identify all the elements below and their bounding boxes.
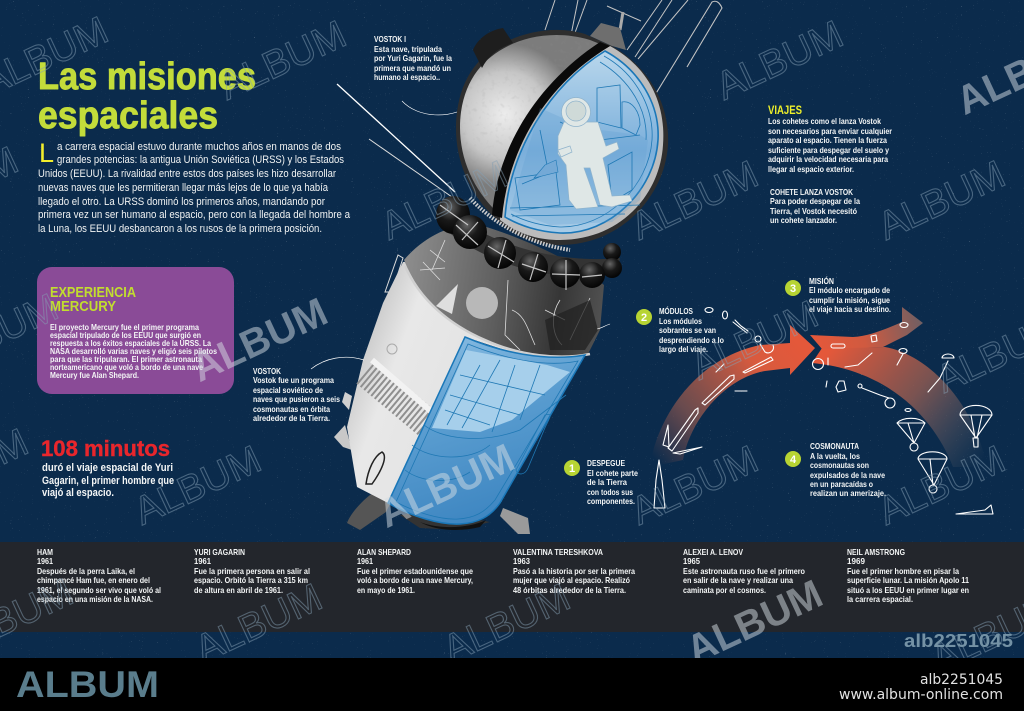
intro text block [38,138,351,235]
dome rim [405,266,590,357]
watermarks: ALBUM [372,436,521,537]
intro text block: nuevas naves que les permitieran llegar más lejos de lo que ya había [38,182,329,194]
mission trajectory arrows [650,307,993,514]
text block: Viajes: suficiente para despegar del suelo y [768,146,889,155]
arrow: ascent [650,325,815,467]
step 4: Cosmonauta: en un paracaídas o [810,480,873,489]
text block: Viajes: Los cohetes como el lanza Vostok [768,117,881,126]
watermarks: ALBUM [710,13,850,109]
arrow: return descent [812,347,987,467]
bio: Alan Shepard [357,548,473,595]
callout: 108 minutos [41,436,174,499]
text block: Viajes: aparato al espacio. Tienen la fuerza [768,136,887,145]
step 1: Despegue: 1 [569,463,575,475]
watermarks: ALBUM [128,438,268,534]
watermarks: ALBUM [625,153,765,249]
title: espaciales [38,95,218,137]
step 3: Misión [785,275,891,314]
watermarks: ALBUM [437,576,577,672]
sphere silver rim [500,46,663,240]
panel heading: EXPERIENCIA [50,285,136,301]
black separation band [492,42,610,218]
label: Vostok I [374,35,452,82]
bio: Yuri Gagarin: 1961 [194,557,211,566]
step 1: Despegue: El cohete parte [587,469,638,478]
bio: Neil Amstrong: NEIL AMSTRONG [847,548,905,557]
panel: Experiencia Mercury [37,267,234,394]
arrow: mission continues [810,307,923,349]
bio: Valentina Tereshkova: Pasó a la historia por ser la primera [513,567,635,576]
step 1: Despegue: de la Tierra [587,478,627,487]
step 1: Despegue: DESPEGUE [587,459,625,468]
antennae [545,0,722,95]
panel body: Mercury fue Alan Shepard. [50,371,139,380]
bio: Ham: Después de la perra Laika, el [37,567,135,576]
text block: Cohete lanza Vostok: un cohete lanzador. [770,216,837,225]
equipment dome [404,225,604,357]
bio: Alan Shepard: ALAN SHEPARD [357,548,411,557]
intro text block: a carrera espacial estuvo durante muchos años en manos de dos [57,141,341,153]
panel body: respuesta a los éxitos espaciales de la URSS. La [50,339,211,348]
bio: Alan Shepard: en mayo de 1961. [357,586,415,595]
text block: Viajes: llegar al espacio exterior. [768,165,854,174]
cabin panels [597,85,640,135]
step 4: Cosmonauta [785,442,886,498]
footer id and url [839,672,1003,703]
rear nozzle rim [420,520,486,530]
bio: Alexei A. Lenov: 1965 [683,557,700,566]
equipment pipes [420,240,590,350]
intro text block: llegado el otro. La URSS dominó los primeros años, mandando por [38,196,325,208]
text block: Viajes: adquirir la velocidad necesaria para [768,155,888,164]
watermark id: alb2251045 [904,631,1013,651]
step 3: Misión: cumplir la misión, sigue [809,296,890,305]
panel body: El proyecto Mercury fue el primer programa [50,323,199,332]
bio: Alexei A. Lenov: Este astronauta ruso fue el primero [683,567,805,576]
bio: Ham: espacio en una misión de la NASA. [37,595,153,604]
step 1: Despegue [564,459,638,506]
icons: flight sequence [654,308,993,514]
ribbed band [366,372,428,424]
bio: Valentina Tereshkova: 48 órbitas alrededor de la Tierra. [513,586,626,595]
cabin cutaway [505,51,658,233]
bio: Ham: 1961, el segundo ser vivo que voló al [37,586,161,595]
panel body: para que las tripularan. El primer astronauta [50,355,202,364]
watermarks: ALBUM [189,576,329,672]
label: Vostok I: primera que mandó un [374,64,451,73]
watermarks: ALBUM [375,153,515,249]
bio: Yuri Gagarin: Fue la primera persona en salir al [194,567,310,576]
watermarks: ALBUM [872,438,1012,534]
watermarks: ALBUM [213,13,353,109]
panel heading: MERCURY [50,299,116,315]
bio: Neil Amstrong: 1969 [847,557,865,566]
intro text block: grandes potencias: la antigua Unión Soviética (URSS) y los Estados [57,154,344,166]
bio: Alexei A. Lenov: caminata por el cosmos. [683,586,766,595]
watermarks: ALBUM [872,153,1012,249]
callout: 108 minutos: duró el viaje espacial de Yuri [42,462,173,474]
hatch detail [366,452,384,484]
top knob [590,23,626,50]
spacecraft illustration [311,0,722,534]
title [38,56,256,137]
step 4: Cosmonauta: cosmonautas son [810,461,869,470]
lower cutaway: equipment module [388,337,585,524]
text block: Cohete lanza Vostok [770,188,860,225]
long antennas and leader lines [337,84,475,197]
title: Las misiones [38,56,256,98]
label: Vostok I: humano al espacio.. [374,73,440,82]
label: Vostok: espacial soviético de [253,386,323,395]
label: Vostok: naves que pusieron a seis [253,395,340,404]
service module body [347,262,600,503]
step 2: Módulos: 2 [641,312,647,324]
intro text block: Unidos (EEUU). La rivalidad entre estos dos países les hizo desarrollar [38,168,336,180]
intro text block: L [39,138,54,168]
bottom band: astronauts panel [0,542,1024,632]
top hatch [473,28,513,68]
callout: 108 minutos: viajó al espacio. [42,487,114,499]
intro text block: primera vez un ser humano al espacio, pero con la llegada del hombre a [38,209,351,221]
label: Vostok I: por Yuri Gagarin, fue la [374,54,452,63]
bio: Ham: 1961 [37,557,53,566]
bio: Alexei A. Lenov: ALEXEI A. LENOV [683,548,743,557]
footer id and url: www.album-online.com [839,687,1003,703]
step 3: Misión: 3 [790,283,796,295]
watermarks: ALBUM [185,290,334,391]
sphere silver surface [460,35,600,212]
bio: Neil Amstrong: Fue el primer hombre en pisar la [847,567,959,576]
bio: Neil Amstrong [847,548,969,604]
label: Vostok I: Esta nave, tripulada [374,45,442,54]
step 1: Despegue: componentes. [587,497,635,506]
bio: Alexei A. Lenov [683,548,805,595]
step 2: Módulos: largo del viaje. [659,345,708,354]
text block: Viajes [768,103,893,174]
bio: Alan Shepard: voló a bordo de una nave Mercury, [357,576,473,585]
bio: Neil Amstrong: situó a los EEUU en primer lugar en [847,586,969,595]
watermarks: ALBUM [680,572,829,673]
dome machinery dark [545,300,598,350]
step 2: Módulos [636,305,724,354]
bio: Alan Shepard: Fue el primer estadounidense que [357,567,473,576]
step 2: Módulos: desprendiendo a lo [659,336,724,345]
step 4: Cosmonauta: A la vuelta, los [810,452,860,461]
label: Vostok I: VOSTOK I [374,35,406,44]
text block: Cohete lanza Vostok: Para poder despegar de la [770,197,860,206]
bio: Yuri Gagarin: YURI GAGARIN [194,548,245,557]
step 4: Cosmonauta: realizan un amerizaje. [810,489,886,498]
label: Vostok: Vostok fue un programa [253,376,334,385]
bio: Alexei A. Lenov: en salir de la nave y realizar una [683,576,793,585]
bio: Valentina Tereshkova: mujer que viajó al espacio. Realizó [513,576,630,585]
bio: Neil Amstrong: superficie lunar. La misión Apolo 11 [847,576,969,585]
intro text block: la Luna, los EEUU desbancaron a los rusos de la primera posición. [38,223,322,235]
label: Vostok: cosmonautas en órbita [253,405,330,414]
step 3: Misión: El módulo encargado de [809,286,890,295]
rear legs and fins [334,255,530,534]
thruster sphere ring [436,196,622,290]
panel body: norteamericano que voló a bordo de una nave [50,363,203,372]
bio: Ham: HAM [37,548,53,557]
bio: Ham: chimpancé Ham fue, en enero del [37,576,150,585]
panel body [50,323,217,380]
sphere outer shell [456,30,668,245]
footer id and url: alb2251045 [920,672,1003,688]
panel heading [50,285,136,315]
dark collar [440,200,620,277]
label: Vostok: VOSTOK [253,367,281,376]
bio: Alan Shepard: 1961 [357,557,373,566]
panel body: espacial tripulado de los EEUU que surgió en [50,331,201,340]
label: Vostok [253,367,340,423]
step 4: Cosmonauta: expulsados de la nave [810,471,885,480]
text block: Cohete lanza Vostok: Tierra, el Vostok necesitó [770,207,857,216]
label: Vostok: alrededor de la Tierra. [253,414,330,423]
bio: Ham [37,548,161,604]
watermarks: ALBUM [685,293,825,389]
step 4: Cosmonauta: COSMONAUTA [810,442,859,451]
panel body: NASA desarrolló varias naves y eligió seis pilotos [50,347,217,356]
watermarks: ALBUM [625,438,765,534]
step 3: Misión: el viaje hacia su destino. [809,305,891,314]
step 2: Módulos: Los módulos [659,317,702,326]
step 3: Misión: MISIÓN [809,275,834,286]
step 2: Módulos: sobrantes se van [659,326,716,335]
silver chain strip [470,198,570,250]
bio: Yuri Gagarin: de altura en abril de 1961. [194,586,283,595]
astronaut [558,98,632,209]
text block: Viajes: VIAJES [768,103,802,117]
step 1: Despegue: con todos sus [587,488,633,497]
text block: Viajes: son necesarios para enviar cualquier [768,127,893,136]
bio: Yuri Gagarin [194,548,310,595]
footer bar [0,658,1024,711]
callout: 108 minutos: Gagarin, el primer hombre que [42,475,174,487]
bio: Neil Amstrong: la carrera espacial. [847,595,913,604]
callout: 108 minutos: 108 minutos [41,436,170,461]
step 4: Cosmonauta: 4 [790,454,797,466]
round plate [466,287,498,319]
step 2: Módulos: MÓDULOS [659,305,693,316]
footer logo: ALBUM [16,664,159,705]
bio: Yuri Gagarin: espacio. Orbitó la Tierra a 315 km [194,576,308,585]
text block: Cohete lanza Vostok: COHETE LANZA VOSTOK [770,188,853,197]
bio: Valentina Tereshkova [513,548,635,595]
bio: Valentina Tereshkova: VALENTINA TERESHKOVA [513,548,603,557]
bio: Valentina Tereshkova: 1963 [513,557,530,566]
